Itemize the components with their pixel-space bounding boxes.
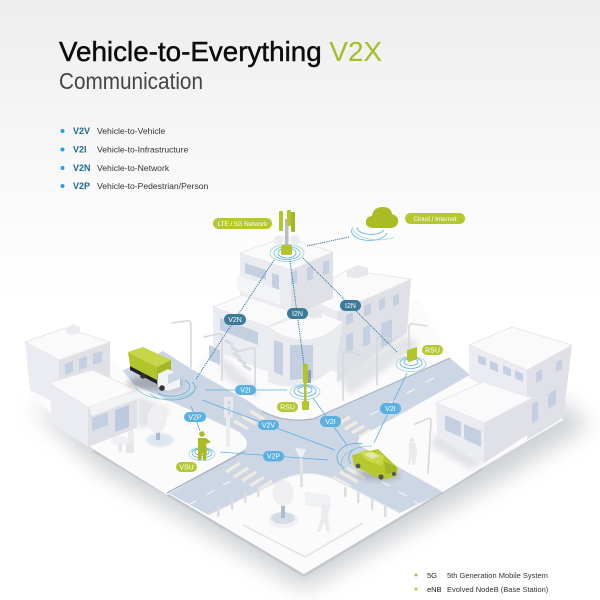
building: central top tier (237, 237, 333, 318)
label: VSU (176, 462, 197, 472)
RSU unit: right (407, 347, 417, 362)
connector: I2N to RSU (290, 261, 304, 365)
VSU pedestrian (198, 431, 211, 460)
legend: communication types: Vehicle-to-Pedestrian/Person (97, 181, 209, 191)
curb: left block (167, 451, 245, 493)
tree: left (146, 405, 174, 447)
cloud icon (352, 207, 398, 240)
legend: abbreviations: eNB (427, 585, 442, 594)
legend: communication types: V2P (73, 181, 90, 191)
label: RSU centre: RSU (280, 404, 295, 412)
tree: bottom (268, 480, 298, 528)
label: V2P lower: V2P (267, 454, 280, 461)
yield sign (295, 448, 306, 487)
label: V2I right: V2I (385, 406, 396, 413)
connector: V2P upper (191, 406, 200, 431)
label: V2I upper (235, 385, 256, 395)
title: Vehicle-to-Everything V2X (59, 36, 382, 67)
label: RSU right (422, 345, 443, 355)
connector: V2P lower (220, 452, 328, 460)
building: central curved front (268, 308, 343, 386)
connector: V2V (202, 400, 335, 450)
ground shadows (137, 335, 484, 470)
city base plate (28, 372, 590, 590)
person: bottom (317, 502, 330, 532)
bench (305, 492, 331, 510)
connector: I2N to right RSU (303, 258, 397, 352)
connector: V2I truck (205, 389, 287, 391)
label: VSU: VSU (179, 464, 194, 472)
building: left back (25, 324, 110, 405)
legend: communication types: V2V (73, 126, 90, 136)
legend: communication types: Vehicle-to-Vehicle (97, 126, 166, 136)
building: central lower left wing (209, 295, 300, 372)
bollards (217, 486, 386, 517)
legend: communication types: Vehicle-to-Infrastructure (97, 144, 188, 154)
sidewalk: bottom block (208, 473, 400, 574)
label: V2V (258, 420, 279, 430)
connector: V2I lower (313, 398, 347, 445)
truck (127, 347, 183, 391)
crosswalks and lane marks (188, 378, 434, 505)
RSU unit: traffic light (302, 364, 311, 410)
label: I2N right: I2N (345, 303, 356, 310)
label: RSU centre (277, 402, 298, 412)
curb: top block (262, 358, 450, 420)
label: Cloud / Internet: Cloud / Internet (413, 216, 457, 223)
label: I2N centre: I2N (292, 311, 303, 318)
connector: V2N (196, 260, 274, 379)
label: Cloud / Internet (405, 213, 465, 224)
label: I2N right (340, 300, 361, 311)
legend: abbreviations (414, 571, 549, 594)
label: V2N: V2N (228, 317, 242, 324)
curb and planter: bottom block (208, 473, 400, 557)
connector: tower to cloud (307, 237, 349, 246)
connector: V2I right (374, 373, 407, 443)
traffic light: left (224, 397, 233, 447)
legend: communication types: V2I (73, 144, 87, 154)
person: right (408, 437, 417, 465)
label: V2I upper: V2I (240, 388, 251, 394)
label: RSU right: RSU (425, 348, 440, 354)
label: V2P upper (184, 412, 206, 422)
building: central right wing (302, 265, 411, 382)
signal rings: RSU units and VSU (189, 356, 426, 460)
antenna tower (270, 210, 304, 262)
roads (120, 351, 470, 515)
building: right upper (469, 327, 572, 440)
sidewalk: right block (358, 350, 565, 492)
car (352, 449, 400, 480)
building: right lower (436, 382, 538, 463)
label: LTE / 5G Network (213, 218, 272, 229)
sidewalk: left block (30, 345, 247, 495)
legend: communication types: V2N (73, 163, 91, 173)
legend: abbreviations: 5th Generation Mobile System (447, 571, 548, 580)
subtitle: Communication (59, 68, 203, 94)
street lights (172, 321, 431, 473)
label: LTE / 5G Network: LTE / 5G Network (218, 221, 268, 228)
label: V2I lower: V2I (325, 419, 336, 426)
legend: abbreviations: Evolved NodeB (Base Station) (447, 585, 549, 594)
label: V2N (224, 314, 246, 325)
stairs (225, 340, 251, 370)
legend: abbreviations: 5G (427, 571, 437, 580)
label: V2P lower (263, 451, 284, 462)
label: I2N centre (287, 308, 308, 319)
car signal rings (337, 443, 372, 473)
truck signal rings (135, 380, 198, 400)
building: left shop (49, 370, 139, 447)
legend: communication types: Vehicle-to-Network (97, 163, 170, 173)
legend: communication types (60, 126, 209, 191)
label: V2I lower (320, 416, 341, 427)
label: V2V: V2V (262, 422, 275, 430)
label: V2I right (380, 403, 401, 414)
cafe table and chairs (111, 430, 134, 453)
label: V2P upper: V2P (188, 414, 202, 422)
sidewalk: top block (193, 300, 450, 420)
